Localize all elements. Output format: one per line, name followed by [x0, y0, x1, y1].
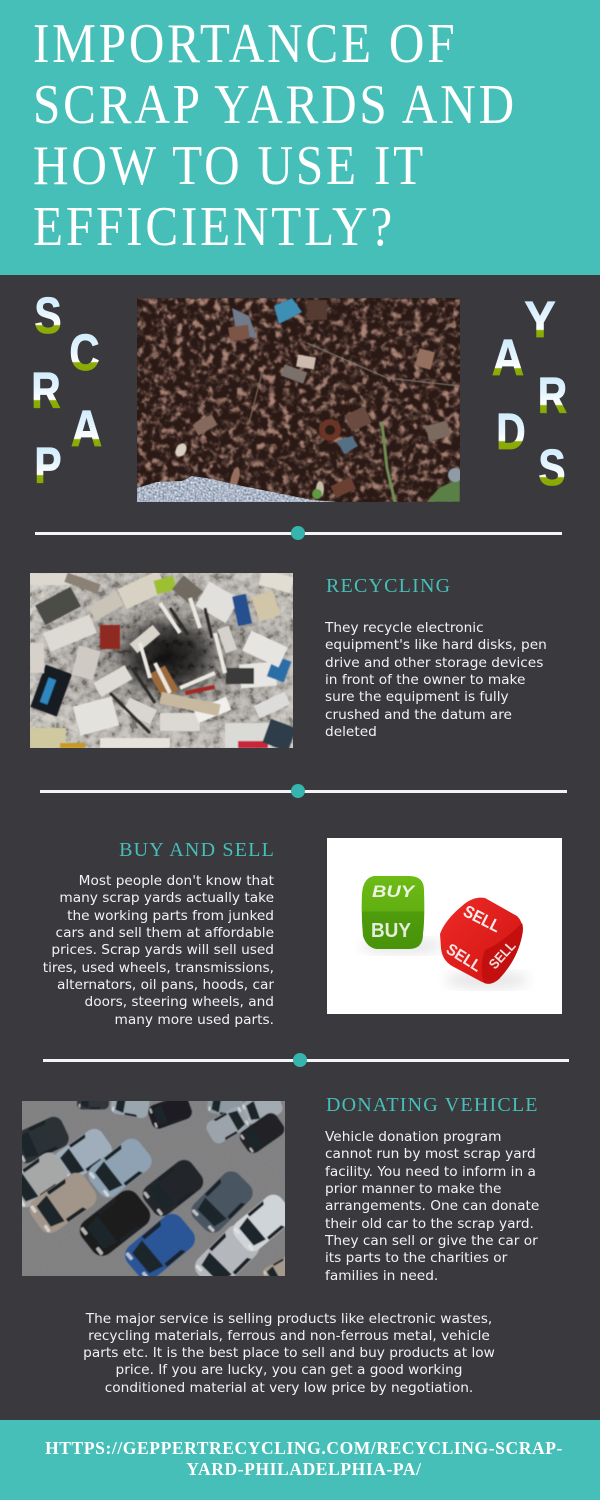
- text: closing paragraph: price. If you are lucky, you can get a good working: [116, 1362, 462, 1378]
- footer link text: YARD-PHILADELPHIA-PA/: [186, 1459, 422, 1479]
- title: IMPORTANCE OF: [33, 13, 457, 75]
- text: donating vehicle: arrangements. One can donate: [325, 1198, 539, 1214]
- icon: green buy die: BUY: [372, 882, 416, 901]
- text: closing paragraph: The major service is selling products like electronic wastes,: [86, 1310, 492, 1326]
- title: EFFICIENTLY?: [33, 196, 395, 258]
- photo: buy and sell dice: [327, 838, 562, 1014]
- icon: red sell die: [440, 898, 523, 984]
- text: recycling: equipment's like hard disks, pen: [325, 637, 547, 653]
- icon: red sell die: SELL: [460, 902, 504, 936]
- text: recycling: deleted: [325, 724, 377, 740]
- text: donating vehicle: They can sell or give the car or: [325, 1233, 538, 1249]
- text: buy and sell: doors, steering wheels, and: [85, 994, 274, 1010]
- heading: recycling: RECYCLING: [326, 575, 451, 597]
- text: buy and sell: the working parts from junked: [67, 908, 274, 924]
- text: closing paragraph: [83, 1310, 495, 1396]
- text: donating vehicle: families in need.: [325, 1268, 438, 1284]
- decorative letters: SCRAP YARDS: S: [34, 287, 62, 344]
- text: donating vehicle: prior manner to make the: [325, 1181, 501, 1197]
- text: closing paragraph: conditioned material at very low price by negotiation.: [105, 1380, 473, 1396]
- text: closing paragraph: recycling materials, ferrous and non-ferrous metal, vehicle: [88, 1328, 490, 1344]
- decorative letters: SCRAP YARDS: S: [538, 439, 566, 496]
- decorative letters: SCRAP YARDS: A: [492, 330, 524, 387]
- footer link text: [45, 1438, 563, 1479]
- text: recycling: drive and other storage devices: [325, 655, 543, 671]
- decorative letters: SCRAP YARDS: P: [34, 437, 62, 494]
- photo: parked cars: [22, 1101, 285, 1276]
- text: recycling: in front of the owner to make: [325, 672, 525, 688]
- text: recycling: They recycle electronic: [325, 620, 484, 636]
- text: recycling: sure the equipment is fully: [325, 689, 509, 705]
- title: [33, 13, 517, 258]
- text: donating vehicle: Vehicle donation program: [325, 1129, 501, 1145]
- heading: buy and sell: BUY AND SELL: [119, 839, 275, 861]
- icon: red sell die: SELL: [443, 941, 484, 976]
- text: buy and sell: [43, 873, 274, 1028]
- text: donating vehicle: cannot run by most scrap yard: [325, 1146, 536, 1162]
- text: buy and sell: cars and sell them at affordable: [56, 925, 274, 941]
- text: buy and sell: many scrap yards actually take: [59, 890, 274, 906]
- decorative letters: SCRAP YARDS: D: [496, 403, 526, 460]
- title: SCRAP YARDS AND: [33, 74, 517, 136]
- photo: scrap metal pile: [137, 298, 460, 502]
- footer banner: [0, 1420, 600, 1500]
- icon: green buy die: [362, 876, 424, 949]
- decorative letters: SCRAP YARDS: C: [69, 324, 100, 381]
- divider 2: [40, 784, 567, 798]
- decorative letters: SCRAP YARDS: R: [31, 362, 61, 419]
- divider 1: [35, 526, 562, 540]
- icon: green buy die: BUY: [371, 920, 412, 942]
- text: buy and sell: tires, used wheels, transmissions,: [43, 960, 274, 976]
- heading: donating vehicle: DONATING VEHICLE: [326, 1094, 539, 1116]
- text: donating vehicle: facility. You need to inform in a: [325, 1164, 536, 1180]
- text: buy and sell: many more used parts.: [115, 1012, 274, 1028]
- text: buy and sell: alternators, oil pans, hoods, car: [57, 977, 274, 993]
- footer link text: HTTPS://GEPPERTRECYCLING.COM/RECYCLING-SCRAP-: [45, 1438, 563, 1458]
- decorative letters: SCRAP YARDS: Y: [524, 292, 556, 348]
- text: donating vehicle: its parts to the charities or: [325, 1250, 507, 1266]
- text: closing paragraph: parts etc. It is the best place to sell and buy products at low: [83, 1345, 495, 1361]
- decorative letters: SCRAP YARDS: R: [538, 367, 567, 424]
- decorative letters: SCRAP YARDS: [31, 287, 567, 496]
- icon: red sell die: SELL: [485, 937, 519, 972]
- text: buy and sell: prices. Scrap yards will sell used: [51, 942, 274, 958]
- text: donating vehicle: [324, 1129, 539, 1284]
- decorative letters: SCRAP YARDS: A: [71, 401, 102, 458]
- text: donating vehicle: their old car to the scrap yard.: [325, 1216, 534, 1232]
- title: HOW TO USE IT: [33, 135, 426, 197]
- divider 3: [43, 1053, 569, 1067]
- text: recycling: [324, 620, 547, 740]
- text: buy and sell: Most people don't know that: [79, 873, 274, 889]
- title banner: [0, 0, 600, 275]
- photo: swirl of books and magazines: [30, 573, 293, 748]
- text: recycling: crushed and the datum are: [325, 707, 512, 723]
